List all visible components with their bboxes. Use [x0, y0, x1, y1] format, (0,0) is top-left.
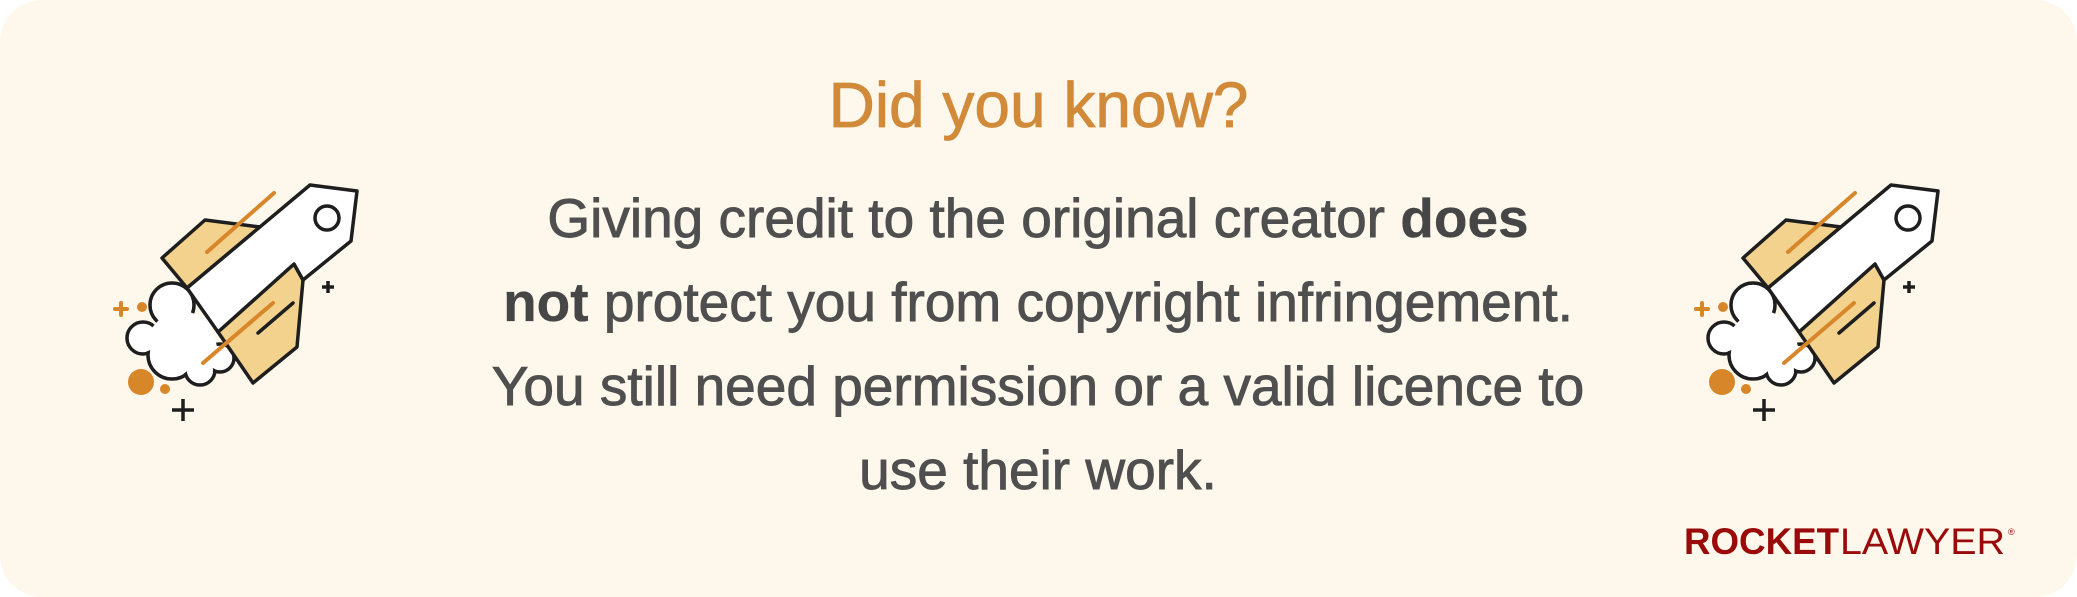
logo: Rocket Lawyer — [1684, 521, 2015, 560]
text block: main message: use their work. — [859, 439, 1217, 501]
text block: main message — [492, 187, 1584, 501]
icon: rocket left — [113, 183, 359, 421]
icon: rocket right — [1694, 183, 1940, 421]
text block: main message: Giving credit to the original creator does — [547, 187, 1529, 249]
text block: main message: not protect you from copyright infringement. — [503, 271, 1573, 333]
text block: main message: You still need permission or a valid licence to — [492, 355, 1584, 417]
title: Did you know? — [829, 69, 1248, 141]
logo: Rocket Lawyer: ® — [2008, 527, 2015, 537]
